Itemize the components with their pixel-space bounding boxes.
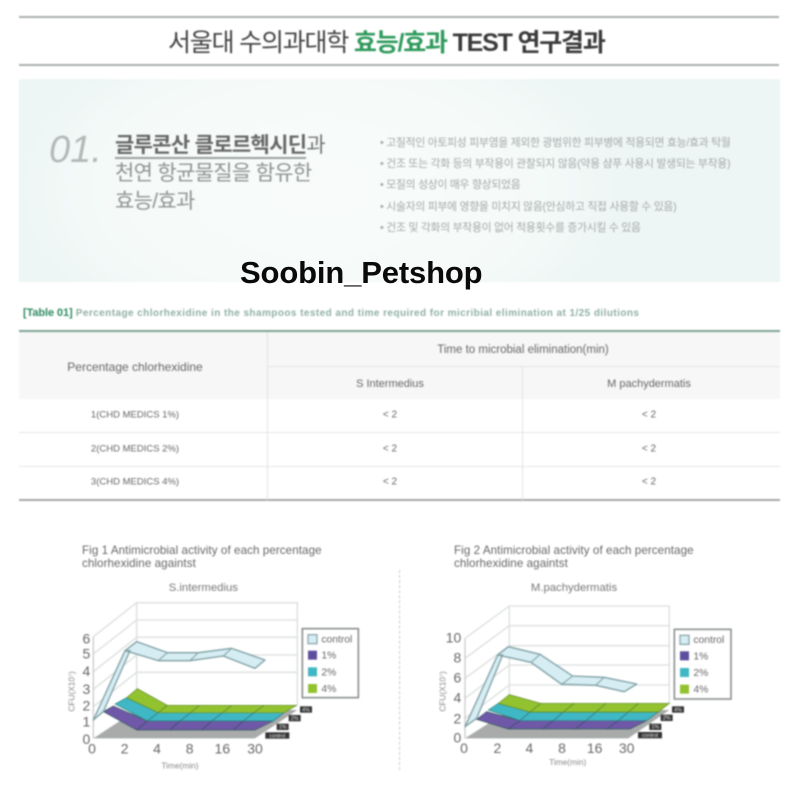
section heading: 글루콘산 클로르헥시딘 <box>115 134 306 157</box>
x axis labels: 16 <box>215 740 230 756</box>
legend: 2% <box>693 668 708 679</box>
figure 1 caption: chlorhexidine againtst <box>82 557 196 570</box>
section heading: 효능/효과 <box>115 190 195 213</box>
benefits list: • 모질의 성상이 매우 향상되었음 <box>380 179 520 191</box>
series: 2% <box>115 698 284 721</box>
axis titles: CFU(X10⁷) <box>67 671 77 712</box>
figure 1 caption <box>82 544 322 570</box>
row 2 <box>90 444 656 454</box>
row 3: 3(CHD MEDICS 4%) <box>91 476 179 488</box>
legend: 1% <box>321 651 336 662</box>
chart 1: S.intermedius <box>67 582 360 770</box>
x axis labels: 8 <box>558 740 566 756</box>
benefits list: • 시술자의 피부에 영향을 미치지 않음(안심하고 직접 사용할 수 있음) <box>380 201 676 213</box>
row 3: < 2 <box>383 476 397 488</box>
row 1: < 2 <box>642 410 656 420</box>
series tags: 4% <box>674 707 682 713</box>
y axis labels: 8 <box>454 650 462 666</box>
header: time: Time to microbial elimination(min) <box>437 344 609 356</box>
legend <box>302 629 358 698</box>
figure 1 caption: Fig 1 Antimicrobial activity of each percentage <box>82 544 322 557</box>
row 3 <box>90 476 656 488</box>
x axis labels: 2 <box>121 740 129 756</box>
section number: 01. <box>49 129 102 171</box>
row 1: 1(CHD MEDICS 1%) <box>91 410 179 420</box>
series tags: control <box>269 733 285 739</box>
axis titles: Time(min) <box>161 760 199 770</box>
watermark: Soobin_Petshop <box>240 255 482 290</box>
chart 1: S.intermedius: S.intermedius <box>169 582 238 594</box>
x axis labels <box>460 740 635 756</box>
series tags: 2% <box>291 716 299 722</box>
benefits list: • 건조 및 각화의 부작용이 없어 적용횟수를 증가시킬 수 있음 <box>380 222 641 234</box>
x axis labels: 8 <box>186 740 194 756</box>
title: 서울대 수의과대학 효능/효과 TEST 연구결과 <box>168 29 605 57</box>
legend: 4% <box>693 685 708 696</box>
row 1: < 2 <box>383 410 397 420</box>
y axis labels: 1 <box>82 714 90 730</box>
series: control <box>93 642 265 720</box>
data table <box>18 329 781 502</box>
row 2: < 2 <box>383 444 397 454</box>
series: 4% <box>498 695 669 712</box>
floor <box>93 710 297 738</box>
y axis labels: 2 <box>82 698 90 714</box>
y axis labels: 3 <box>82 681 90 697</box>
x axis labels: 0 <box>460 740 468 756</box>
series: 1% <box>477 712 647 729</box>
y axis labels: 2 <box>454 710 462 726</box>
chart 2: M.pachydermatis <box>437 582 733 767</box>
section heading: 천연 항균물질을 함유한 <box>115 162 311 185</box>
row 2: 2(CHD MEDICS 2%) <box>91 444 179 454</box>
series: 4% <box>127 689 297 713</box>
row 1 <box>91 410 656 420</box>
section heading: 과 <box>306 134 325 157</box>
series tags <box>265 706 312 739</box>
series: 2% <box>488 703 658 721</box>
x axis labels: 4 <box>153 740 161 756</box>
y axis labels: 10 <box>446 630 462 646</box>
header: M pachydermatis: M pachydermatis <box>607 378 691 390</box>
header: S Intermedius: S Intermedius <box>356 378 424 390</box>
series tags: control <box>642 733 658 739</box>
row 2: < 2 <box>642 444 656 454</box>
legend: 2% <box>321 667 336 678</box>
chart 2: M.pachydermatis: M.pachydermatis <box>531 582 617 594</box>
header: percentage: Percentage chlorhexidine <box>67 360 203 374</box>
y axis labels <box>82 630 90 747</box>
figure 2 caption: Fig 2 Antimicrobial activity of each percentage <box>454 544 694 557</box>
series tags: 1% <box>279 725 287 731</box>
y axis labels: 0 <box>454 730 462 746</box>
benefits list: • 고질적인 아토피성 피부염을 제외한 광범위한 피부병에 적용되면 효능/효과 탁월 <box>380 137 731 149</box>
axis titles: CFU(X10⁷) <box>437 671 447 712</box>
section heading <box>114 133 326 213</box>
x axis labels: 30 <box>619 740 635 756</box>
figure 2 caption <box>454 544 694 570</box>
legend: control <box>693 635 724 646</box>
table caption: [Table 01] Percentage chlorhexidine in the shampoos tested and time required for micribial elimination at 1/25 dilutions <box>23 307 639 319</box>
benefits list <box>380 136 731 234</box>
series tags: 2% <box>663 716 671 722</box>
legend: 4% <box>321 684 336 695</box>
legend <box>674 629 731 699</box>
benefits list: • 건조 또는 각화 등의 부작용이 관찰되지 않음(약용 샴푸 사용시 발생되는 부작용) <box>380 158 730 170</box>
row 3: < 2 <box>642 476 656 488</box>
panel: efficacy summary <box>19 79 780 282</box>
x axis labels <box>88 740 263 756</box>
y axis labels: 4 <box>454 690 462 706</box>
y axis labels <box>446 630 462 746</box>
divider between figures <box>399 570 400 770</box>
series: control <box>465 647 637 727</box>
legend: control <box>321 634 352 645</box>
x axis labels: 0 <box>88 740 96 756</box>
figure 2 caption: chlorhexidine againtst <box>454 557 568 570</box>
floor <box>465 710 669 738</box>
x axis labels: 30 <box>247 740 263 756</box>
legend: 1% <box>693 651 708 662</box>
x axis labels: 4 <box>525 740 533 756</box>
y axis labels: 5 <box>82 646 90 662</box>
x axis labels: 2 <box>493 740 501 756</box>
series tags: 4% <box>302 707 310 713</box>
axis titles <box>437 671 586 767</box>
axis titles: Time(min) <box>549 757 586 767</box>
y axis labels: 0 <box>82 731 90 747</box>
axis titles <box>67 671 199 770</box>
y axis labels: 6 <box>454 670 462 686</box>
x axis labels: 16 <box>587 740 603 756</box>
series tags: 1% <box>651 725 659 731</box>
series tags <box>638 706 684 739</box>
series: 1% <box>103 706 273 730</box>
y axis labels: 4 <box>82 663 90 679</box>
y axis labels: 6 <box>82 630 90 646</box>
